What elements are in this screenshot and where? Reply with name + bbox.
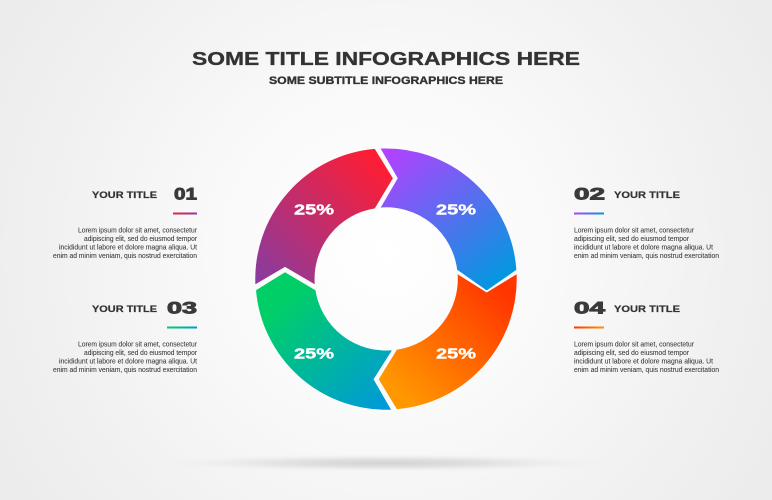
label: 25% purple: 25%	[436, 202, 476, 218]
number 01: 01	[174, 184, 197, 204]
body text: adipiscing elit, sed do eiusmod tempor	[84, 348, 198, 357]
label: 25% orange: 25%	[436, 346, 476, 362]
segment: purple-blue 25%	[380, 148, 517, 291]
label: 25% red: 25%	[294, 202, 334, 218]
heading: your title: YOUR TITLE	[92, 304, 157, 315]
segment: red-violet 25%	[255, 148, 393, 285]
donut chart	[255, 148, 517, 410]
body text: enim ad minim veniam, quis nostrud exercitation	[53, 365, 197, 374]
body text: enim ad minim veniam, quis nostrud exercitation	[574, 365, 719, 374]
body text: incididunt ut labore et dolore magna aliqua. Ut	[574, 356, 713, 366]
body text: incididunt ut labore et dolore magna aliqua. Ut	[59, 356, 197, 366]
panel: 01	[53, 184, 198, 260]
body text: adipiscing elit, sed do eiusmod tempor	[574, 234, 690, 243]
accent line	[574, 212, 604, 214]
body text: adipiscing elit, sed do eiusmod tempor	[574, 348, 690, 357]
segment: orange 25%	[378, 274, 517, 410]
body text: incididunt ut labore et dolore magna aliqua. Ut	[59, 242, 197, 252]
number 03: 03	[167, 298, 197, 318]
body text	[53, 340, 198, 374]
body text: enim ad minim veniam, quis nostrud exercitation	[53, 251, 197, 260]
body text: enim ad minim veniam, quis nostrud exercitation	[574, 251, 719, 260]
body text: adipiscing elit, sed do eiusmod tempor	[84, 234, 198, 243]
subtitle: SOME SUBTITLE INFOGRAPHICS HERE	[269, 75, 503, 87]
body text: Lorem ipsum dolor sit amet, consectetur	[574, 340, 695, 348]
heading: your title: YOUR TITLE	[92, 190, 157, 201]
panel: 02	[574, 184, 719, 260]
body text	[53, 226, 198, 260]
body text: Lorem ipsum dolor sit amet, consectetur	[78, 226, 198, 234]
body text: Lorem ipsum dolor sit amet, consectetur	[78, 340, 198, 348]
accent line	[574, 326, 604, 328]
ground shadow	[151, 454, 621, 472]
number 02: 02	[574, 184, 605, 204]
body text	[574, 226, 719, 260]
body text: Lorem ipsum dolor sit amet, consectetur	[574, 226, 695, 234]
panel: 04	[574, 298, 719, 374]
title: SOME TITLE INFOGRAPHICS HERE	[192, 49, 580, 69]
segment: green-blue 25%	[256, 272, 393, 410]
accent line	[167, 326, 197, 328]
accent line	[173, 212, 197, 214]
body text	[574, 340, 719, 374]
heading: your title: YOUR TITLE	[614, 190, 680, 201]
heading: your title: YOUR TITLE	[614, 304, 680, 315]
panel: 03	[53, 298, 198, 374]
number 04: 04	[574, 298, 606, 318]
body text: incididunt ut labore et dolore magna aliqua. Ut	[574, 242, 713, 252]
label: 25% green: 25%	[294, 346, 334, 362]
